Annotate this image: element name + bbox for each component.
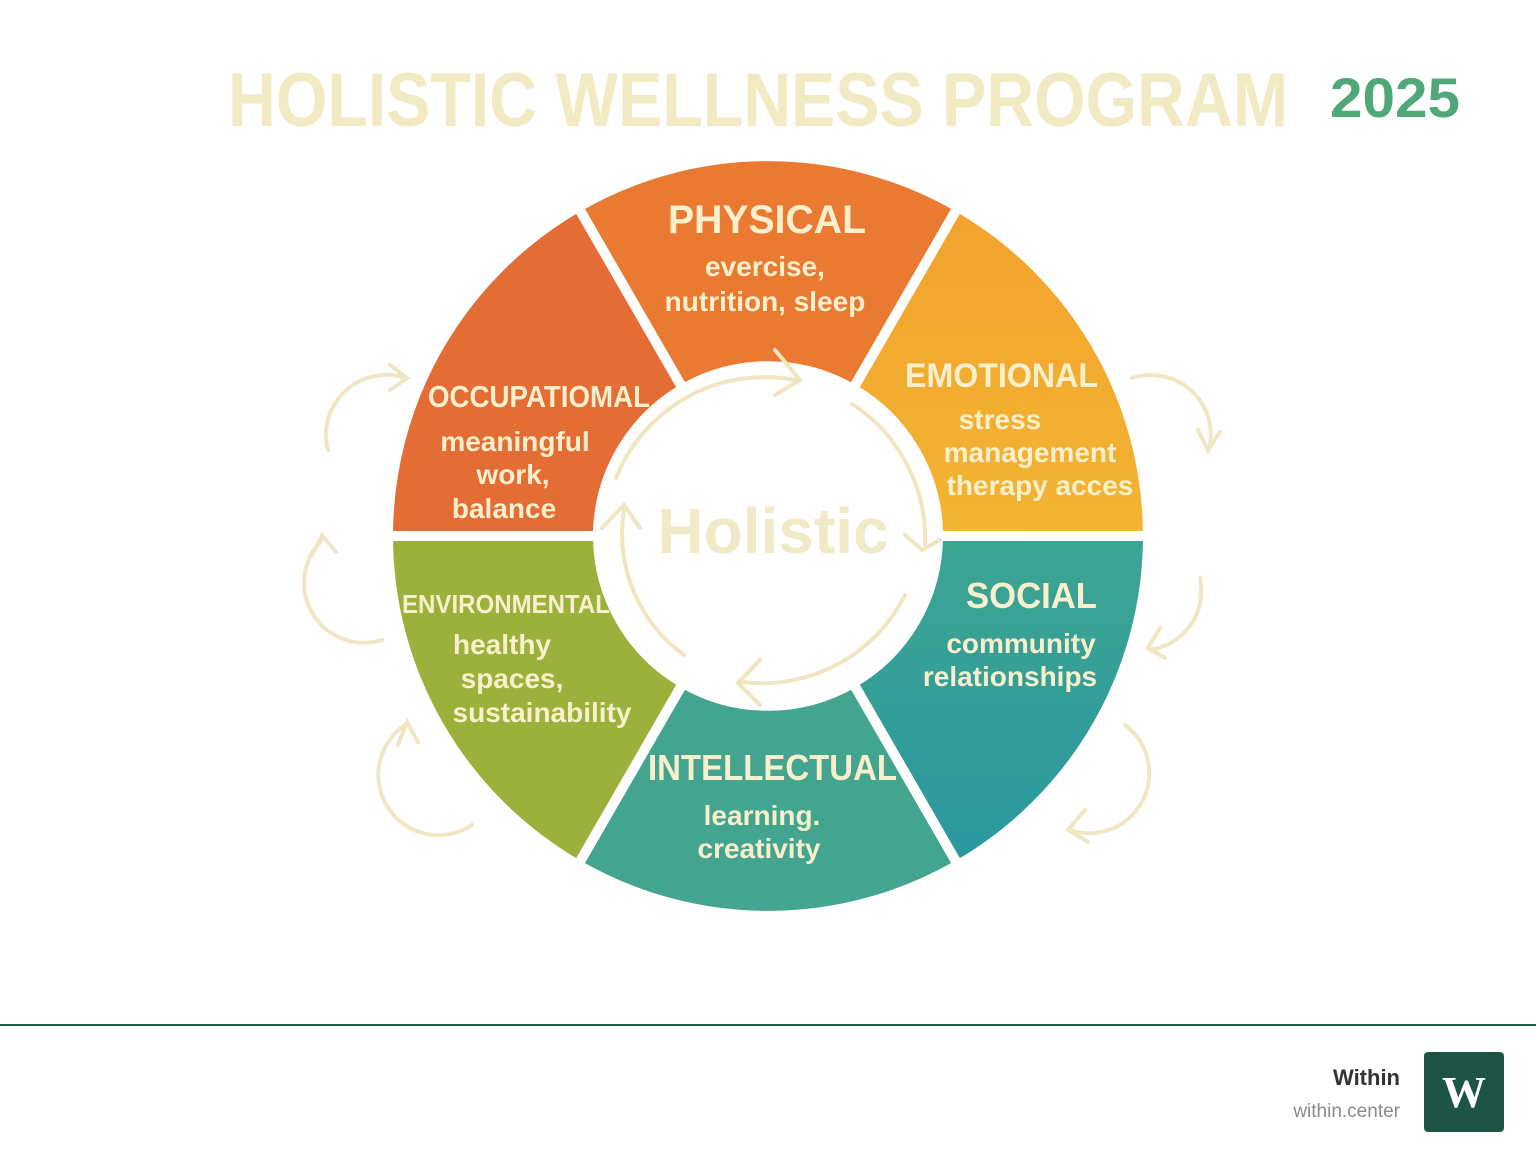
segment labels: PHYSICAL	[668, 198, 866, 242]
segment labels: INTELLECTUAL	[648, 747, 897, 788]
segment labels: management	[944, 437, 1116, 468]
segment labels: sustainability	[453, 697, 632, 728]
segment labels: work,	[475, 459, 550, 490]
segment labels: nutrition, sleep	[665, 286, 865, 317]
segment labels: meaningful	[440, 426, 590, 457]
title: 2025	[1330, 66, 1460, 129]
logo: W	[1442, 1068, 1486, 1117]
footer brand: within.center	[1292, 1101, 1401, 1122]
segment labels: SOCIAL	[966, 575, 1097, 616]
footer brand: Within	[1333, 1065, 1400, 1090]
segment labels: spaces,	[461, 663, 563, 694]
logo	[1424, 1052, 1504, 1132]
arrows: outer	[304, 365, 1220, 842]
segment labels: EMOTIONAL	[905, 357, 1098, 395]
segment labels: therapy acces	[947, 470, 1133, 501]
segment labels: OCCUPATIOMAL	[428, 379, 650, 414]
segment labels: stress	[959, 404, 1041, 435]
footer brand	[1292, 1052, 1504, 1132]
segment: occupational	[388, 207, 683, 536]
segment: intellectual	[578, 683, 958, 916]
segment labels: relationships	[923, 661, 1097, 692]
segment labels	[402, 198, 1133, 864]
wheel	[388, 156, 1148, 916]
segment: emotional	[853, 207, 1148, 536]
segment: environmental	[388, 536, 683, 865]
segment labels: evercise,	[705, 251, 825, 282]
segment labels: community	[946, 628, 1096, 659]
arrows: inner cycle	[602, 350, 940, 705]
segment labels: ENVIRONMENTAL	[402, 589, 610, 619]
title: HOLISTIC WELLNESS PROGRAM	[228, 58, 1288, 143]
segment: physical	[578, 156, 958, 389]
segment labels: healthy	[453, 629, 551, 660]
segment: social	[853, 536, 1148, 865]
segment labels: learning.	[704, 800, 820, 831]
segment labels: creativity	[698, 833, 821, 864]
footer divider	[0, 1024, 1536, 1026]
segment labels: balance	[452, 493, 556, 524]
center text: Holistic	[657, 495, 889, 567]
